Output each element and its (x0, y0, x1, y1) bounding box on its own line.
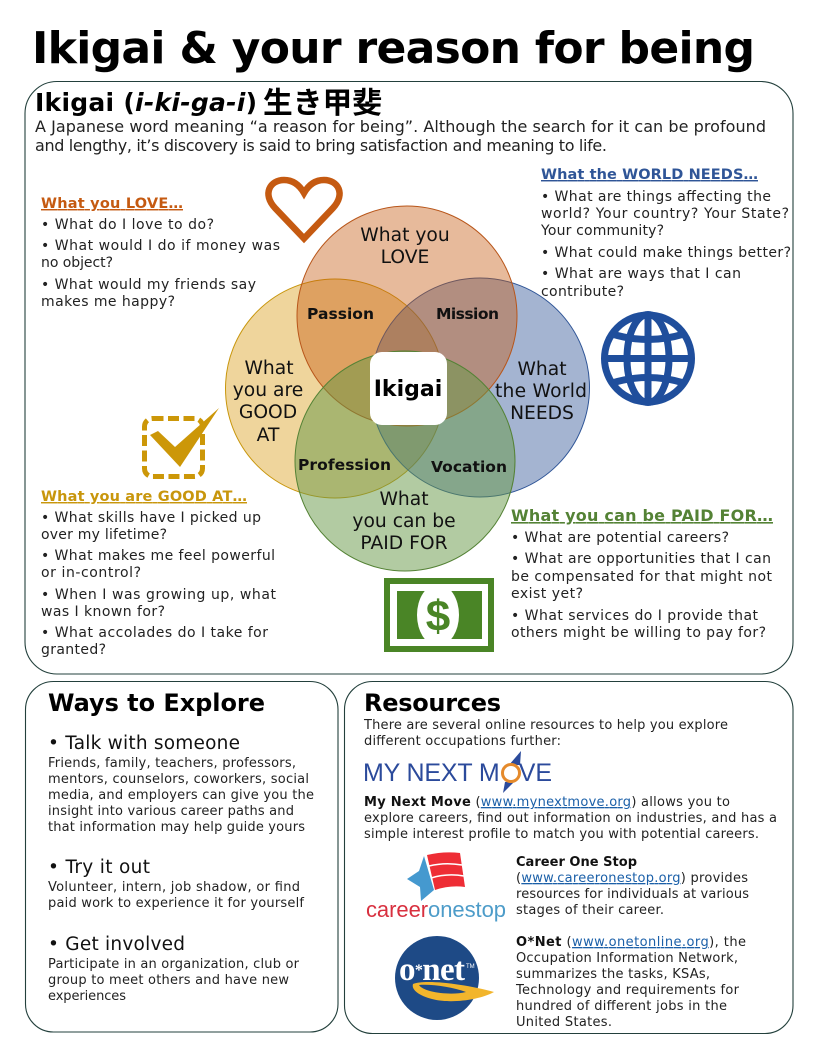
panel heading: 生き甲斐 (263, 79, 382, 122)
logo: o*net (395, 936, 494, 1020)
text block: what the world needs: • What are ways that I can (541, 266, 741, 282)
text: o*net: summarizes the tasks, KSAs, (516, 967, 710, 982)
item: try it out: paid work to experience it for yourself (48, 896, 304, 911)
item: try it out: • Try it out (48, 857, 150, 878)
text: career one stop: resources for individuals at various (516, 887, 749, 902)
intro text: A Japanese word meaning “a reason for being”. Although the search for it can be profound (35, 117, 766, 136)
text: o*net: hundred of different jobs in the (516, 999, 727, 1014)
overlap labels: Vocation (431, 458, 507, 476)
item: talk with someone: insight into various career paths and (48, 804, 294, 819)
text block: what you can be paid for: What you can be PAID FOR… (511, 506, 773, 525)
circle labels: you can be (352, 511, 456, 532)
text block: what you are good at: • When I was growing up, what (41, 587, 276, 603)
text block: what you are good at: What you are GOOD AT… (41, 489, 247, 505)
text block: what you are good at: granted? (41, 642, 106, 658)
center label: Ikigai (374, 377, 442, 402)
logo: careeronestop: careeronestop (366, 897, 506, 922)
circle labels: AT (257, 425, 280, 446)
text block: what the world needs: • What could make things better? (541, 245, 791, 261)
overlap labels (298, 305, 507, 476)
text block: what you are good at: • What makes me feel powerful (41, 548, 275, 564)
text block: what you can be paid for (511, 506, 773, 641)
heading: resources: Resources (364, 689, 501, 717)
venn diagram (226, 206, 590, 571)
text block: what you love: • What would my friends say (41, 277, 256, 293)
text: career one stop: (www.careeronestop.org) provides (516, 871, 748, 886)
text block: what you are good at: • What accolades do I take for (41, 625, 268, 641)
icon: checkbox (144, 408, 219, 476)
item: get involved: Participate in an organization, club or (48, 957, 300, 972)
text: my next move: explore careers, find out information on industries, and has a (364, 811, 777, 826)
circle labels: the World (495, 381, 587, 402)
circle: paid for (295, 351, 515, 571)
circle labels: What (517, 359, 567, 380)
logo: careeronestop (366, 852, 506, 922)
text block: what you are good at: • What skills have I picked up (41, 510, 261, 526)
text: o*net (515, 935, 746, 1030)
text: o*net: Technology and requirements for (515, 983, 740, 998)
text block: what the world needs: • What are things affecting the (541, 189, 771, 205)
logo: my next move: MY NEXT MOVE (363, 759, 552, 787)
icon: globe (604, 314, 692, 403)
logo: o*net: * (415, 962, 423, 979)
text block: what you love: • What would I do if money was (41, 238, 280, 254)
circle labels: NEEDS (510, 403, 574, 424)
item: talk with someone: that information may help guide yours (48, 820, 305, 835)
text: o*net: Occupation Information Network, (516, 951, 738, 966)
circle labels: What you (360, 225, 450, 246)
overlap labels: Passion (307, 305, 374, 323)
text block: what you love: What you LOVE… (41, 196, 183, 212)
text: career one stop (516, 855, 749, 918)
text: o*net: O*Net (www.onetonline.org), the (516, 935, 746, 950)
icon: dollar bill (384, 578, 494, 652)
text block: what you are good at: or in-control? (41, 565, 141, 581)
center tile (370, 352, 447, 425)
text block: what the world needs (540, 167, 791, 300)
overlap labels: Profession (298, 456, 391, 474)
item: talk with someone: • Talk with someone (48, 733, 240, 754)
resources intro (363, 718, 728, 749)
item: talk with someone: Friends, family, teachers, professors, (48, 756, 296, 771)
intro text: and lengthy, it’s discovery is said to bring satisfaction and meaning to life. (35, 136, 607, 155)
circle labels: GOOD (239, 402, 297, 423)
item: get involved (48, 934, 300, 1004)
circle: world needs (370, 278, 590, 497)
panel: ikigai overview (25, 79, 793, 674)
circle labels: What (244, 358, 294, 379)
circle: love (297, 206, 517, 426)
text block: what you can be paid for: • What are potential careers? (511, 530, 729, 546)
panel: resources (344, 682, 793, 1034)
resources intro: different occupations further: (364, 734, 561, 749)
text block: what you are good at (41, 489, 276, 658)
text block: what you can be paid for: exist yet? (511, 586, 583, 602)
intro text (35, 117, 766, 155)
text block: what you love: • What do I love to do? (41, 217, 214, 233)
text: career one stop: Career One Stop (516, 855, 637, 870)
logo: my next move (363, 751, 552, 793)
logo: o*net: TM (466, 964, 475, 970)
panel heading: Ikigai (i-ki-ga-i) (35, 88, 257, 117)
text block: what you love: no object? (41, 255, 113, 271)
text block: what the world needs: What the WORLD NEEDS… (541, 167, 758, 183)
text: career one stop: stages of their career. (516, 903, 664, 918)
text: my next move: simple interest profile to match you with potential careers. (364, 827, 759, 842)
text: o*net: United States. (516, 1015, 612, 1030)
logo: o*net: o (399, 952, 416, 988)
text block: what you can be paid for: • What services do I provide that (511, 608, 758, 624)
icon: heart (268, 180, 340, 238)
title: Ikigai & your reason for being (32, 23, 755, 74)
circle labels: What (379, 489, 429, 510)
overlap labels: Mission (436, 305, 499, 323)
item: get involved: • Get involved (48, 934, 185, 955)
heading: ways to explore: Ways to Explore (48, 689, 265, 717)
text block: what you can be paid for: others might be willing to pay for? (511, 625, 766, 641)
logo: o*net: net (422, 952, 465, 988)
text block: what the world needs: contribute? (541, 284, 624, 300)
circle labels: you are (233, 380, 303, 401)
item: talk with someone: media, and employers can give you the (48, 788, 314, 803)
item: talk with someone: mentors, counselors, coworkers, social (48, 772, 309, 787)
text block: what you are good at: was I known for? (41, 604, 165, 620)
text block: what you can be paid for: • What are opportunities that I can (511, 551, 771, 567)
text block: what you are good at: over my lifetime? (41, 527, 167, 543)
item: talk with someone (48, 733, 314, 835)
text block: what you can be paid for: be compensated for that might not (511, 569, 772, 585)
text: my next move: My Next Move (www.mynextmove.org) allows you to (364, 795, 730, 810)
text: my next move (364, 795, 777, 842)
circle labels: PAID FOR (360, 533, 448, 554)
text block: what you love (41, 196, 280, 310)
circle labels (233, 225, 587, 554)
text block: what the world needs: world? Your country? Your State? (541, 206, 789, 222)
circle labels: LOVE (381, 247, 429, 268)
circle: good at (226, 279, 444, 498)
resources intro: There are several online resources to help you explore (363, 718, 728, 733)
item: get involved: experiences (48, 989, 126, 1004)
text block: what you love: makes me happy? (41, 294, 175, 310)
item: try it out (48, 857, 304, 911)
icon: dollar bill: $ (426, 592, 450, 641)
item: get involved: group to meet others and have new (48, 973, 289, 988)
text block: what the world needs: Your community? (540, 223, 664, 239)
panel heading (35, 79, 382, 122)
panel: ways to explore (26, 682, 338, 1032)
item: try it out: Volunteer, intern, job shadow, or find (48, 880, 300, 895)
